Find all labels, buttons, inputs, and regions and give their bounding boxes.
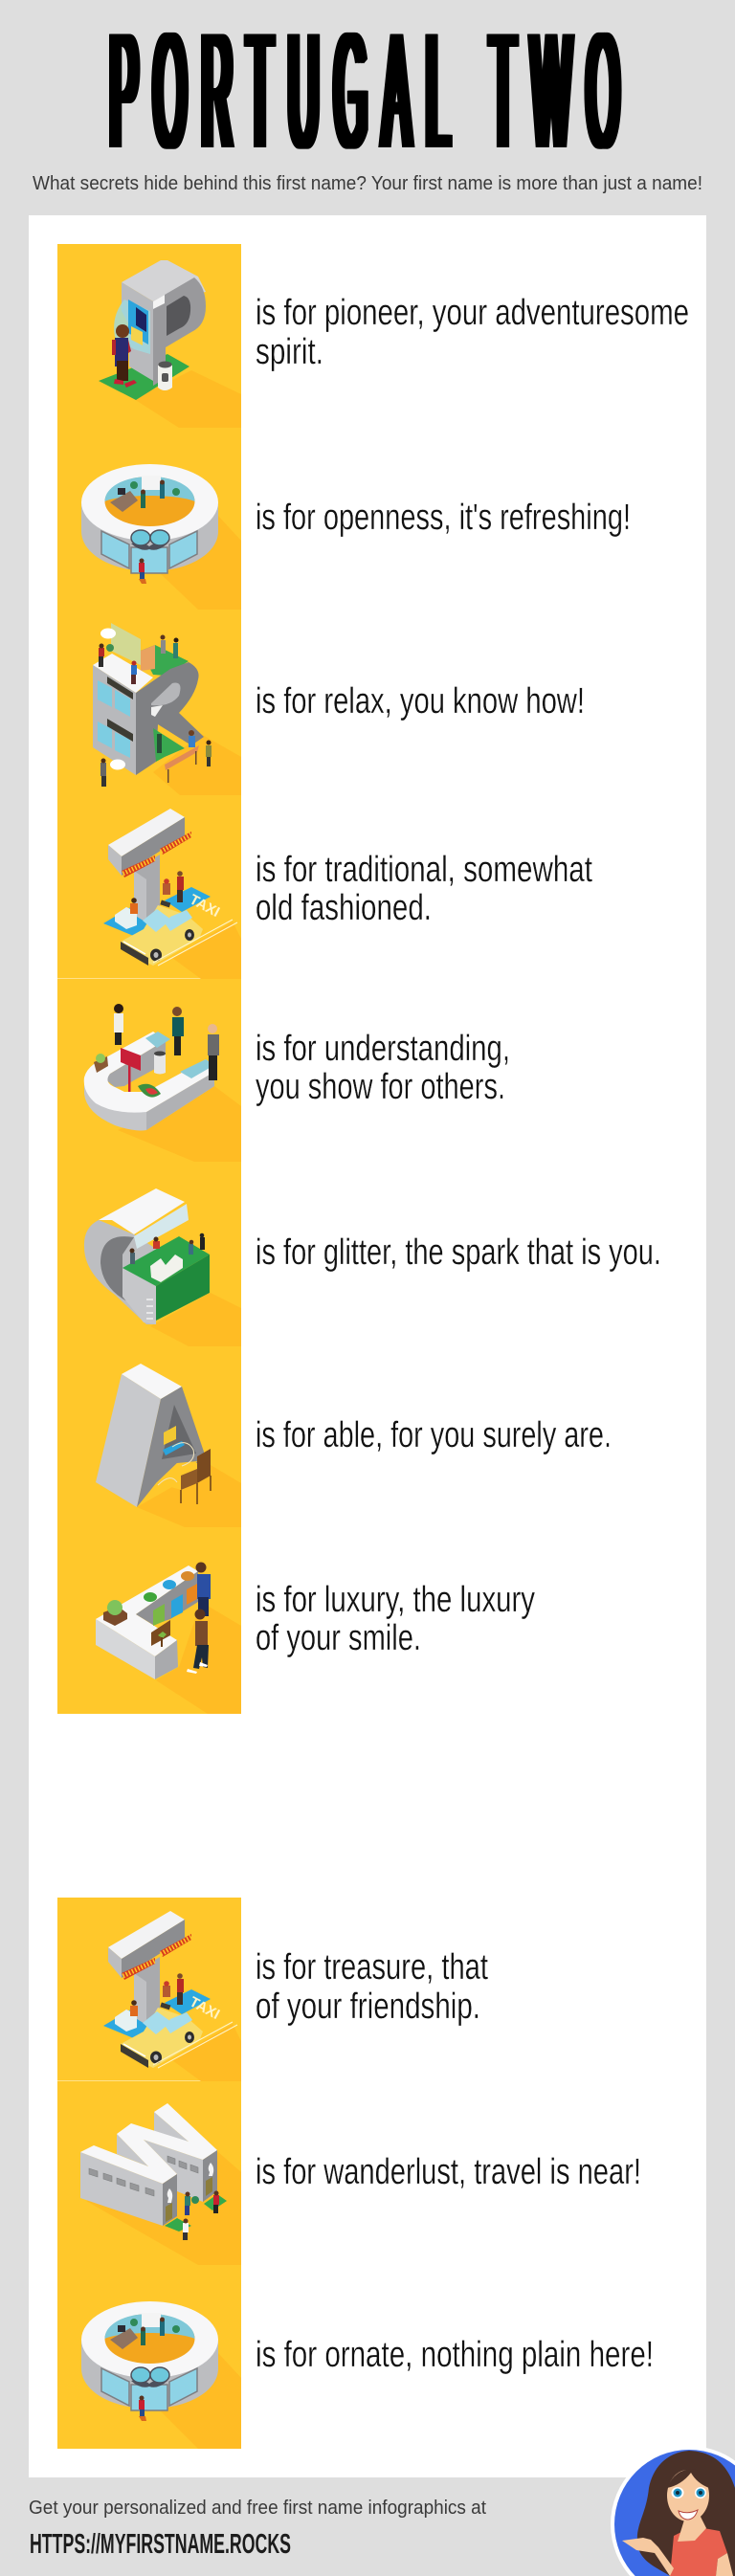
text: relax: is for relax, you know how! (256, 681, 585, 722)
icon: letter U counter (57, 979, 241, 1163)
text: luxury (256, 1580, 535, 1658)
icon: letter O optician (57, 428, 241, 611)
text: traditional: is for traditional, somewhat (256, 850, 592, 890)
row: A (57, 1346, 612, 1530)
avatar (611, 2446, 735, 2576)
text: able: is for able, for you surely are. (256, 1415, 612, 1455)
icon: letter P ATM (57, 244, 241, 428)
text: traditional: old fashioned. (256, 888, 432, 928)
title: PORTUGAL TWO (110, 0, 635, 183)
row: T (57, 795, 592, 979)
text: traditional (256, 850, 592, 928)
text: treasure: is for treasure, that (256, 1947, 488, 1988)
subtitle: What secrets hide behind this first name? Your first name is more than just a name! (33, 173, 702, 194)
text: treasure (256, 1947, 488, 2027)
text: treasure: of your friendship. (256, 1987, 480, 2027)
icon: letter O optician (57, 2265, 241, 2449)
icon: letter L recycling (57, 1530, 241, 1714)
footer text: Get your personalized and free first name infographics at (29, 2498, 486, 2519)
icon: letter A (57, 1346, 241, 1530)
text: pioneer (256, 293, 689, 372)
text: TAXI on road: TAXI (187, 1994, 222, 2023)
row: O (57, 428, 631, 611)
text: understanding (256, 1029, 510, 1107)
row: L (57, 1530, 535, 1714)
icon: letter G block (57, 1163, 241, 1346)
row: W (57, 2081, 641, 2265)
row: R (57, 611, 585, 795)
text: pioneer: spirit. (256, 332, 323, 372)
icon: letter T taxi (57, 795, 241, 979)
text: TAXI on road: TAXI (187, 892, 222, 921)
text: understanding: is for understanding, (256, 1029, 510, 1069)
text: openness: is for openness, it's refreshing! (256, 498, 631, 538)
row: T second (57, 1898, 488, 2081)
row: P (57, 244, 689, 428)
icon: letter W restrooms (57, 2081, 241, 2265)
text: luxury: is for luxury, the luxury (256, 1580, 535, 1620)
text: understanding: you show for others. (256, 1067, 505, 1107)
footer link: HTTPS://MYFIRSTNAME.ROCKS (30, 2529, 291, 2560)
text: luxury: of your smile. (256, 1618, 421, 1658)
row: G (57, 1163, 661, 1346)
icon: letter T taxi (57, 1898, 241, 2081)
row: O second (57, 2265, 654, 2449)
icon: letter R offices (57, 611, 241, 795)
row: U (57, 979, 510, 1163)
